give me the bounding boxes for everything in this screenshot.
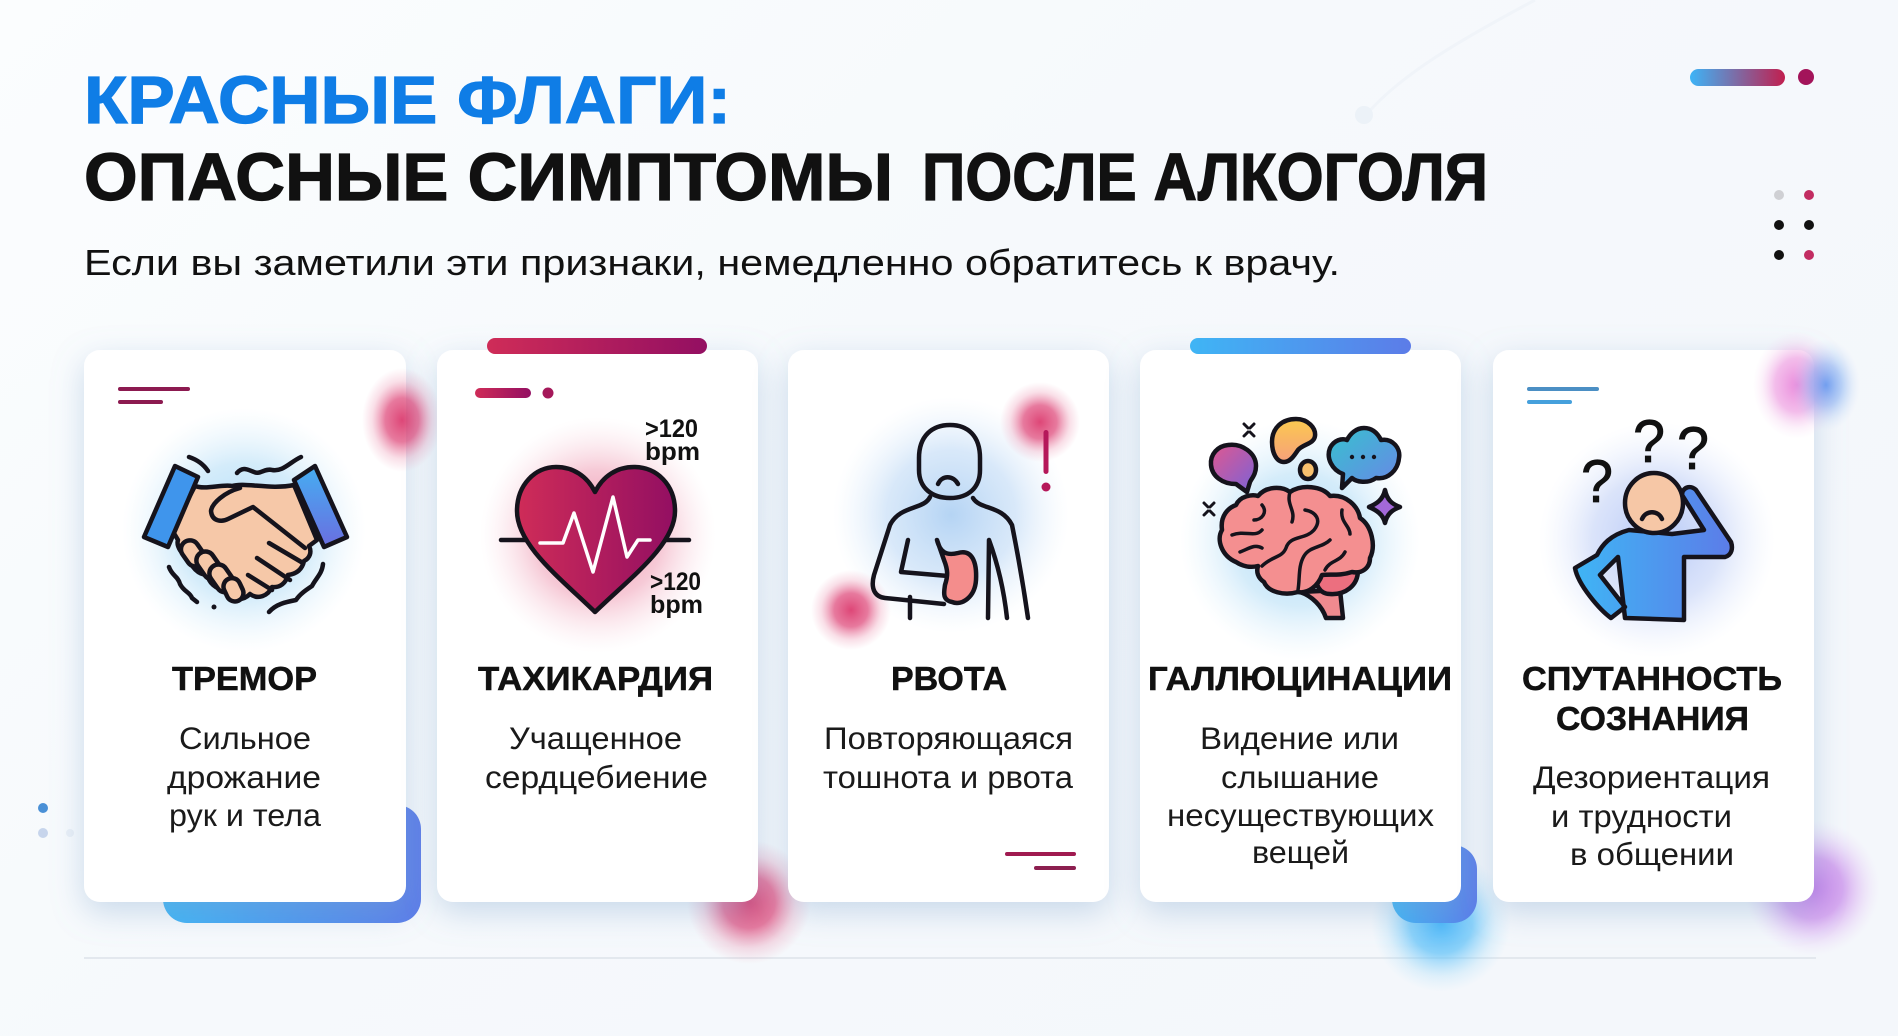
heading (1522, 660, 1782, 737)
title (84, 63, 1488, 215)
description: Учащенное (509, 720, 682, 756)
description: несуществующих (1167, 797, 1434, 833)
icon glow (1539, 422, 1775, 658)
description: слышание (1221, 759, 1379, 795)
label: bpm top: >120 (645, 415, 698, 443)
heading: РВОТА (891, 660, 1007, 697)
card background (788, 350, 1109, 902)
subtitle: Если вы заметили эти признаки, немедленно обратитесь к врачу. (84, 242, 1340, 283)
small lines (1527, 387, 1599, 404)
description: и трудности (1551, 798, 1732, 834)
pink glow top right (1753, 331, 1841, 439)
icon: confused person: ? (1677, 415, 1709, 482)
card background (84, 350, 406, 902)
icon glow (122, 408, 366, 652)
icon: brain with thought bubbles (1204, 419, 1400, 618)
top bar (487, 338, 707, 354)
icon: confused person: ? (1633, 408, 1665, 475)
description: Повторяющаяся (824, 720, 1073, 756)
icon: heart with pulse (501, 467, 689, 612)
label: bpm top (645, 415, 700, 466)
description (485, 720, 708, 795)
pill and dot (475, 388, 554, 398)
panel: tachycardia (437, 338, 758, 902)
card background (1493, 350, 1814, 902)
glow behind card 4 (1371, 852, 1511, 992)
top bar (1190, 338, 1411, 354)
title line 2 right: ПОСЛЕ АЛКОГОЛЯ (922, 140, 1488, 215)
description: тошнота и рвота (823, 759, 1073, 795)
card background (1140, 350, 1461, 902)
icon glow (833, 397, 1069, 633)
title line 1: КРАСНЫЕ ФЛАГИ: (84, 63, 731, 138)
label: bpm bottom: bpm (650, 591, 703, 619)
red glow bottom left (811, 570, 891, 650)
heading: ТАХИКАРДИЯ (478, 660, 713, 697)
description (823, 720, 1073, 795)
icon: exclamation mark (1042, 430, 1050, 492)
glow: card 1 top right (362, 368, 442, 472)
description (167, 720, 321, 833)
heading: ГАЛЛЮЦИНАЦИИ (1148, 660, 1452, 697)
icon: person with stomach (873, 425, 1028, 618)
icon: confused person (1575, 408, 1732, 620)
description (1167, 720, 1434, 870)
background arc decoration (1355, 0, 1535, 124)
label: bpm bottom: >120 (650, 568, 701, 596)
blue glow top right (1792, 339, 1860, 431)
top right accent pill and dot (1690, 69, 1814, 86)
panel: confusion (1493, 331, 1860, 902)
label: bpm top: bpm (645, 438, 700, 466)
left dots (38, 803, 74, 838)
red glow top right (1000, 382, 1080, 462)
heading: СПУТАННОСТЬ (1522, 660, 1782, 697)
panel: vomiting (788, 350, 1109, 902)
blue accent behind card 4 (1392, 845, 1477, 923)
description: в общении (1570, 836, 1734, 872)
small lines (118, 387, 190, 404)
description: сердцебиение (485, 759, 708, 795)
icon: shaking hands (144, 457, 347, 612)
icon glow (1180, 420, 1420, 660)
small lines (1005, 852, 1076, 870)
description: Сильное (179, 720, 311, 756)
description: вещей (1252, 834, 1349, 870)
description: дрожание (167, 759, 321, 795)
panel: hallucinations (1140, 338, 1461, 902)
label: bpm bottom (650, 568, 703, 619)
panel: tremor (84, 350, 406, 902)
description (1533, 759, 1770, 872)
glow behind card 5 (1744, 820, 1880, 956)
description: рук и тела (169, 797, 321, 833)
card background (437, 350, 758, 902)
description: Видение или (1200, 720, 1399, 756)
blue accent behind card 1 (163, 805, 421, 923)
divider (84, 957, 1816, 959)
heading: ТРЕМОР (172, 660, 317, 697)
icon glow (480, 417, 716, 653)
glow behind card 2 (687, 840, 811, 964)
icon: confused person: ? (1581, 448, 1613, 515)
top right dot grid (1774, 190, 1814, 260)
description: Дезориентация (1533, 759, 1770, 795)
title line 2 left: ОПАСНЫЕ СИМПТОМЫ (84, 140, 893, 215)
heading: СОЗНАНИЯ (1556, 700, 1749, 737)
